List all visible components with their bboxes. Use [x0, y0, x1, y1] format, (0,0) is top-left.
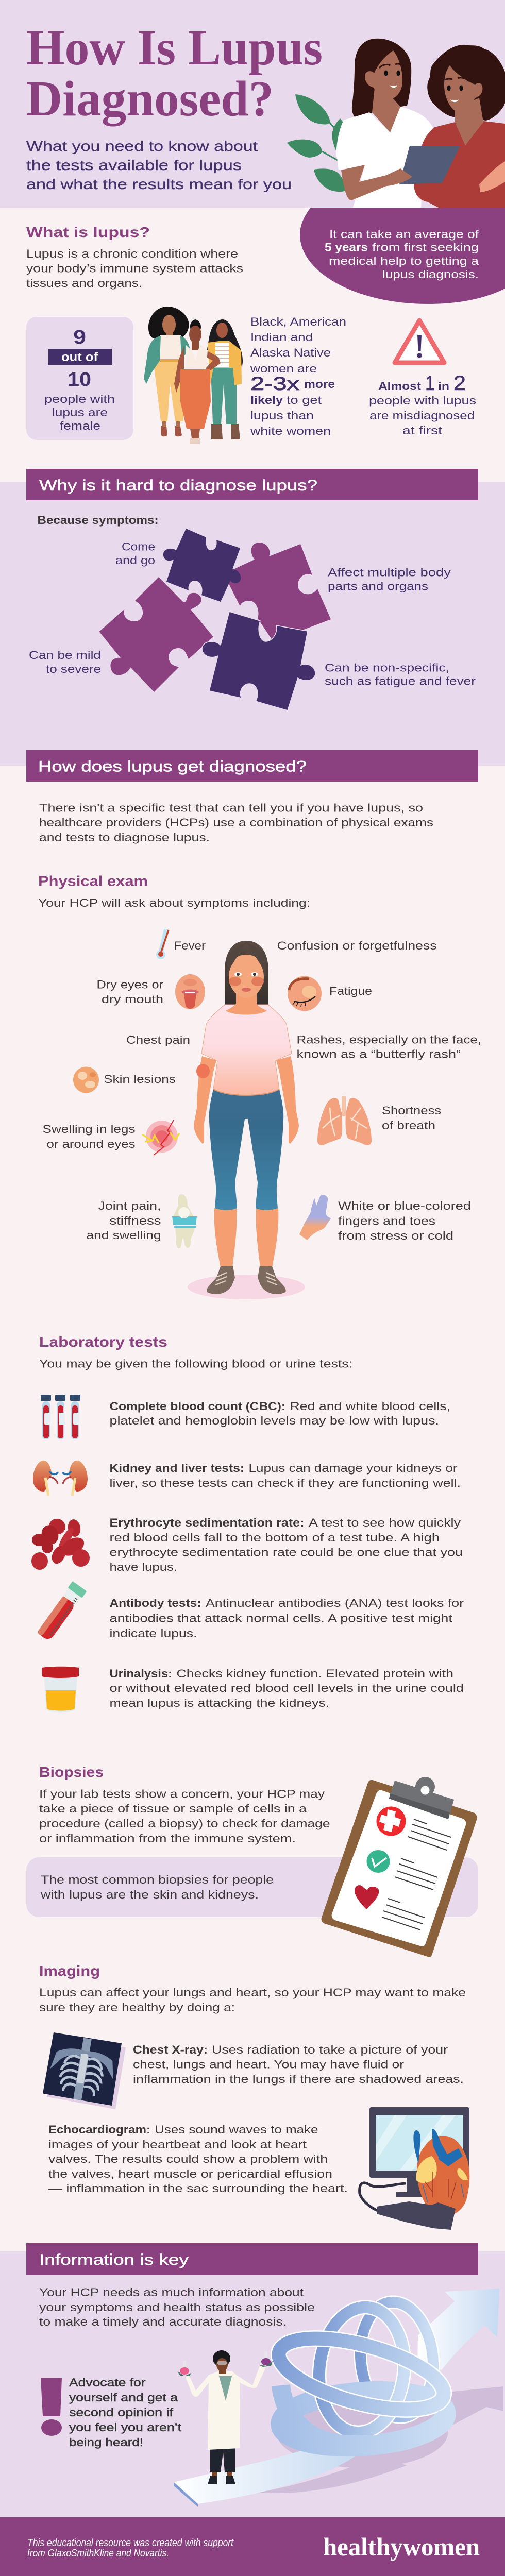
information paragraph: your symptoms and health status as possible: [39, 2301, 315, 2314]
text: urinalysis: mean lupus is attacking the kidneys.: [109, 1697, 329, 1709]
biopsies callout card: [26, 1857, 478, 1917]
symptom label: blue fingers: [338, 1199, 471, 1242]
icon: knee joint: [172, 1194, 197, 1248]
text: kidney and liver tests: Kidney and liver tests:: [109, 1462, 244, 1475]
biopsies paragraph: take a piece of tissue or sample of cells in a: [39, 1802, 307, 1815]
hair: [225, 941, 268, 1005]
neck: [226, 992, 267, 1015]
physical exam intro: Your HCP will ask about symptoms including:: [38, 896, 310, 909]
symptom label: swelling: [42, 1123, 135, 1150]
symptom label: blue fingers: fingers and toes: [338, 1215, 435, 1227]
illustration: tangled ribbon knot: [272, 2298, 451, 2451]
purple callout blob: from first seeking: [372, 241, 479, 253]
advocate text: being heard!: [69, 2436, 143, 2449]
floor shadow: [188, 1275, 305, 1299]
biopsies paragraph: or inflammation from the immune system.: [39, 1832, 296, 1845]
symptom label: blue fingers: White or blue-colored: [338, 1199, 471, 1212]
text: antibody tests: [109, 1597, 464, 1640]
biopsies paragraph: [39, 1788, 330, 1845]
text: erythrocyte sedimentation rate: A test to see how quickly: [309, 1516, 461, 1529]
subtitle: and what the results mean for you: [26, 176, 292, 192]
puzzle label: affect multiple body parts: parts and organs: [328, 580, 428, 592]
background band: why is it hard lavender: [0, 482, 505, 766]
icon: antibody test tube: [36, 1581, 87, 1642]
woman 2 neck and face: [455, 98, 483, 145]
icon: blue fingers hand: [299, 1195, 331, 1240]
symptom label: joint pain: stiffness: [109, 1214, 161, 1227]
background band: information is key lavender: [0, 2251, 505, 2517]
head: [213, 2350, 230, 2367]
icon: warning triangle: [395, 320, 444, 363]
puzzle piece: left: [99, 577, 213, 692]
symptom label: dry eyes or dry mouth: Dry eyes or: [97, 978, 163, 991]
puzzle label: mild to severe: to severe: [46, 663, 101, 675]
icon: tired eye: [288, 976, 322, 1011]
stat: almost 1 in 2 misdiagnosed: people with lupus: [369, 394, 476, 407]
text: complete blood count: Red and white blood cells,: [290, 1400, 450, 1413]
text: 2-3x more likely: lupus than: [250, 409, 314, 422]
text: echocardiogram: valves. The results could show a problem with: [48, 2153, 328, 2165]
eyes: [234, 972, 242, 976]
icon: red blood cells: [31, 1516, 90, 1570]
text: 2-3x more likely: to get: [287, 394, 322, 406]
puzzle label: non-specific: [325, 662, 476, 687]
information paragraph: to make a timely and accurate diagnosis.: [39, 2315, 287, 2328]
mouth: [242, 988, 251, 992]
pink flask: [177, 2361, 191, 2376]
section heading: information is key: [26, 2243, 478, 2275]
purple callout blob: medical help to getting a: [329, 255, 479, 267]
text: echocardiogram: the valves, heart muscle or pericardial effusion: [48, 2167, 332, 2180]
purple callout blob: It can take an average of: [329, 228, 479, 241]
stat: almost 1 in 2 misdiagnosed: 1: [425, 372, 435, 395]
symptom label: dry eyes or dry mouth: dry mouth: [102, 993, 163, 1006]
text: complete blood count: platelet and hemoglobin levels may be low with lupus.: [109, 1414, 439, 1427]
imaging intro: Lupus can affect your lungs and heart, so your HCP may want to make: [39, 1986, 466, 1999]
section heading: how does lupus get diagnosed: How does lupus get diagnosed?: [38, 758, 307, 775]
footer: [0, 2517, 505, 2576]
symptom label: dry eyes or dry mouth: [97, 978, 163, 1006]
footer: This educational resource was created with support: [27, 2537, 234, 2549]
advocate text: you feel you aren’t: [69, 2421, 181, 2434]
biopsies callout card: The most common biopsies for people: [41, 1873, 274, 1886]
text: echocardiogram: Uses sound waves to make: [155, 2123, 318, 2136]
subtitle: the tests available for lupus: [26, 157, 242, 173]
text: antibody tests: antibodies that attack normal cells. A positive test might: [109, 1612, 452, 1625]
section heading: how does lupus get diagnosed: [26, 750, 478, 782]
text: 2-3x more likely: white women: [250, 425, 331, 437]
what is lupus text: [26, 247, 243, 290]
shirt: [201, 1005, 292, 1095]
text: chest x-ray: Uses radiation to take a picture of your: [212, 2043, 448, 2056]
arms: [194, 1056, 216, 1144]
puzzle illustration: [99, 529, 331, 710]
purple callout blob: 5 years: [325, 241, 368, 253]
body figure: [188, 941, 305, 1299]
biopsies callout card: with lupus are the skin and kidneys.: [40, 1888, 259, 1901]
puzzle label: affect multiple body parts: [328, 566, 451, 592]
illustration: shadow under tangled arrow: [258, 2386, 503, 2493]
symptom label: chest pain: Chest pain: [126, 1033, 190, 1046]
text: chest x-ray: Chest X-ray:: [133, 2043, 208, 2056]
text: complete blood count: [109, 1400, 450, 1427]
text: urinalysis: [109, 1667, 464, 1709]
text: chest x-ray: inflammation in the lungs if there are shadowed areas.: [133, 2073, 464, 2086]
tablet: [399, 146, 460, 184]
symptom label: shortness of breath: Shortness: [382, 1104, 441, 1117]
text: erythrocyte sedimentation rate: [109, 1516, 463, 1573]
symptom label: swelling: Swelling in legs: [42, 1123, 135, 1136]
symptom label: rashes: known as a “butterfly rash”: [297, 1048, 461, 1060]
because symptoms label: Because symptoms:: [37, 514, 159, 527]
text: echocardiogram: Echocardiogram:: [48, 2123, 150, 2136]
imaging heading: Imaging: [39, 1963, 100, 1979]
text: chest x-ray: chest, lungs and heart. You may have fluid or: [133, 2058, 404, 2071]
symptom label: shortness of breath: [382, 1104, 441, 1132]
text: chest x-ray: [133, 2043, 464, 2086]
information paragraph: Your HCP needs as much information about: [39, 2286, 304, 2299]
icon: blood tubes: [41, 1395, 80, 1439]
imaging intro: [39, 1986, 466, 2014]
text: echocardiogram: — inflammation in the sac surrounding the heart.: [48, 2182, 348, 2195]
subtitle: What you need to know about: [26, 138, 258, 154]
illustration: two women with a tablet: [336, 39, 505, 208]
text: 2-3x more likely: Indian and: [250, 331, 313, 344]
icon: urine cup: [42, 1667, 79, 1712]
text: 2-3x more likely: Black, American: [250, 315, 346, 328]
symptom label: shortness of breath: of breath: [382, 1119, 435, 1132]
trousers: [210, 2447, 235, 2472]
icon: dry mouth: [175, 974, 205, 1009]
heart: [413, 2129, 469, 2215]
purple callout blob: [300, 208, 505, 304]
footer: healthywomen: [323, 2532, 480, 2561]
puzzle piece: upper right: [228, 543, 331, 649]
lab coat: [186, 2365, 266, 2450]
symptom label: fever: Fever: [174, 939, 206, 952]
puzzle label: non-specific: Can be non-specific,: [325, 662, 449, 674]
stat card: 9 out of 10: 9: [73, 327, 86, 348]
stat card: 9 out of 10: 10: [68, 369, 91, 391]
stat card: 9 out of 10: lupus are: [52, 406, 108, 419]
stat: almost 1 in 2 misdiagnosed: are misdiagnosed: [369, 409, 475, 422]
biopsies heading: Biopsies: [39, 1764, 104, 1780]
title: [26, 20, 323, 126]
text: urinalysis: Urinalysis:: [109, 1667, 172, 1680]
text: erythrocyte sedimentation rate: Erythrocyte sedimentation rate:: [109, 1516, 304, 1529]
illustration: leaves: [287, 94, 346, 192]
stat: almost 1 in 2 misdiagnosed: [369, 372, 476, 437]
woman 2 dress: [414, 121, 505, 208]
biopsies paragraph: procedure (called a biopsy) to check for damage: [39, 1817, 330, 1830]
purple callout blob: lupus diagnosis.: [382, 268, 479, 281]
symptom label: skin lesions: Skin lesions: [104, 1073, 176, 1086]
exclamation mark: [41, 2378, 62, 2436]
woman 1 hair: [352, 39, 411, 118]
what is lupus text: tissues and organs.: [26, 277, 142, 290]
puzzle label: mild to severe: Can be mild: [29, 649, 101, 662]
text: complete blood count: Complete blood count (CBC):: [109, 1400, 285, 1413]
stat: almost 1 in 2 misdiagnosed: 2: [453, 372, 466, 395]
symptom label: blue fingers: from stress or cold: [338, 1229, 453, 1242]
icon: thermometer: [156, 930, 169, 959]
stat: almost 1 in 2 misdiagnosed: Almost: [378, 380, 422, 393]
stat card: 9 out of 10: people with: [44, 393, 115, 405]
left woman: [148, 307, 189, 339]
leggings: [209, 1089, 283, 1210]
what is lupus text: Lupus is a chronic condition where: [26, 247, 238, 260]
section heading: why is it hard: [26, 469, 478, 500]
clipboard green check: [367, 1850, 390, 1873]
icon: kidneys: [33, 1461, 88, 1496]
middle woman: [190, 319, 201, 330]
text: echocardiogram: images of your heartbeat and look at heart: [48, 2138, 307, 2151]
symptom label: swelling: or around eyes: [46, 1138, 135, 1150]
text: urinalysis: or without elevated red blood cell levels in the urine could: [109, 1682, 464, 1694]
intro paragraph: healthcare providers (HCPs) use a combination of physical exams: [39, 816, 433, 829]
information paragraph: [39, 2286, 315, 2328]
ultrasound probe: [360, 2183, 456, 2230]
intro paragraph: [39, 802, 433, 844]
text: 2-3x more likely: [250, 315, 346, 437]
laboratory tests heading: Laboratory tests: [39, 1334, 167, 1350]
stat card: 9 out of 10: female: [60, 419, 100, 432]
puzzle piece: top: [163, 529, 241, 602]
advocate text: [69, 2376, 181, 2449]
symptom label: rashes: [297, 1033, 481, 1060]
illustration: scientist: [177, 2350, 273, 2484]
clipboard red cross: [376, 1806, 406, 1836]
woman 1 neck and face: [372, 88, 400, 132]
biopsies paragraph: If your lab tests show a concern, your HCP may: [39, 1788, 325, 1800]
purple flask: [259, 2351, 273, 2367]
text: erythrocyte sedimentation rate: have lupus.: [109, 1561, 177, 1573]
text: 2-3x more likely: likely: [250, 394, 283, 406]
text: kidney and liver tests: liver, so these tests can check if they are functioning well.: [109, 1477, 461, 1489]
footer: from GlaxoSmithKline and Novartis.: [27, 2548, 169, 2559]
puzzle label: come and go: Come: [122, 540, 155, 553]
woman 1 shirt: [336, 107, 433, 208]
clipboard heart: [355, 1885, 379, 1909]
text: antibody tests: Antinuclear antibodies (ANA) test looks for: [206, 1597, 464, 1609]
puzzle label: come and go: and go: [115, 554, 155, 567]
stat card: 9 out of 10: [26, 317, 133, 440]
intro paragraph: and tests to diagnose lupus.: [39, 831, 210, 844]
icon: skin lesion: [73, 1066, 99, 1093]
shirt hem overlap: [213, 1089, 279, 1095]
icon: chest x-ray: [43, 2032, 126, 2109]
advocate text: yourself and get a: [69, 2391, 178, 2404]
stat card: 9 out of 10: out of: [61, 350, 98, 364]
right woman: [206, 319, 243, 366]
section heading: information is key: Information is key: [39, 2251, 189, 2268]
intro paragraph: There isn't a specific test that can tell you if you have lupus, so: [39, 802, 423, 814]
icon: lungs: [317, 1096, 372, 1145]
icon: echocardiogram monitor and heart: [360, 2107, 469, 2230]
woman 2 hand: [479, 161, 505, 192]
physical exam heading: Physical exam: [38, 873, 148, 889]
arm rash: [196, 1064, 210, 1078]
text: antibody tests: indicate lupus.: [109, 1627, 197, 1640]
woman 1 arm and hand: [341, 165, 412, 200]
butterfly rash: [229, 977, 241, 986]
woman 2 hair: [427, 45, 505, 121]
imaging intro: sure they are healthy by doing a:: [39, 2001, 235, 2014]
puzzle label: affect multiple body parts: Affect multiple body: [328, 566, 451, 579]
text: erythrocyte sedimentation rate: red blood cells fall to the bottom of a test tube. A high: [109, 1531, 440, 1544]
illustration: arrow path: [174, 2289, 499, 2507]
text: 2-3x more likely: more: [304, 378, 335, 391]
what is lupus heading: What is lupus?: [26, 224, 150, 240]
puzzle label: non-specific: such as fatigue and fever: [325, 675, 476, 687]
puzzle label: mild to severe: [29, 649, 101, 675]
advocate text: second opinion if: [69, 2406, 174, 2419]
symptom label: fatigue: Fatigue: [329, 985, 372, 997]
text: erythrocyte sedimentation rate: erythrocyte sedimentation rate could be one clue that you: [109, 1546, 463, 1559]
symptom label: rashes: Rashes, especially on the face,: [297, 1033, 481, 1046]
title: Diagnosed?: [26, 71, 274, 126]
what is lupus text: your body’s immune system attacks: [26, 262, 243, 275]
stat: almost 1 in 2 misdiagnosed: at first: [402, 424, 442, 437]
shirt: [219, 2376, 232, 2401]
section heading: why is it hard: Why is it hard to diagnose lupus?: [39, 477, 317, 494]
advocate text: Advocate for: [69, 2376, 145, 2389]
shoes: [207, 1266, 235, 1294]
title: How Is Lupus: [26, 20, 323, 75]
text: urinalysis: Checks kidney function. Elevated protein with: [176, 1667, 453, 1680]
stat: almost 1 in 2 misdiagnosed: in: [438, 380, 449, 393]
symptom label: joint pain: Joint pain,: [98, 1199, 161, 1212]
hair parting: [227, 942, 266, 976]
face: [229, 955, 264, 998]
puzzle piece: bottom large: [202, 612, 315, 710]
symptom label: joint pain: [87, 1199, 161, 1242]
puzzle label: come and go: [115, 540, 155, 567]
background band: hero lavender: [0, 0, 505, 208]
calves: [214, 1208, 237, 1267]
laboratory tests intro: You may be given the following blood or urine tests:: [39, 1357, 352, 1370]
icon: clipboard: [322, 1777, 477, 1957]
symptom label: joint pain: and swelling: [87, 1229, 161, 1242]
text: 2-3x more likely: 2-3x: [250, 373, 299, 394]
text: 2-3x more likely: Alaska Native: [250, 346, 331, 359]
text: kidney and liver tests: Lupus can damage your kidneys or: [248, 1462, 458, 1475]
text: kidney and liver tests: [109, 1462, 461, 1489]
icon: swelling: [142, 1120, 179, 1155]
text: echocardiogram: [48, 2123, 348, 2195]
text: 2-3x more likely: women are: [250, 362, 317, 375]
illustration: three women: [144, 307, 243, 444]
subtitle: [26, 138, 292, 192]
symptom label: confusion: Confusion or forgetfulness: [277, 939, 437, 952]
text: antibody tests: Antibody tests:: [109, 1597, 201, 1609]
